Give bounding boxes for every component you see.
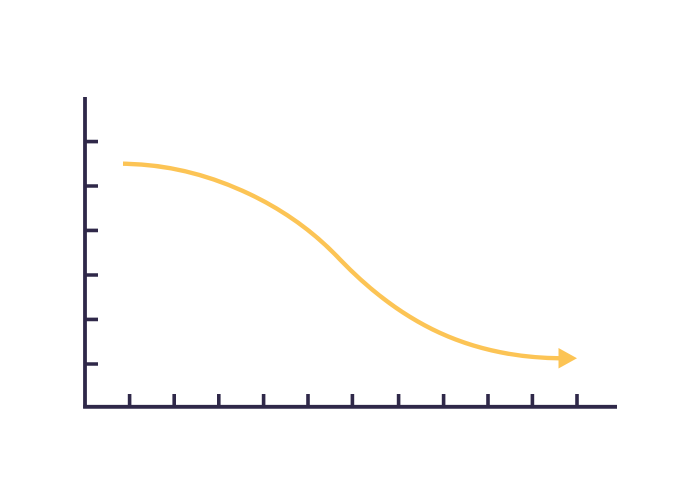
trend curve with arrow <box>123 164 577 368</box>
x axis ticks <box>130 394 577 406</box>
curve line <box>123 164 561 358</box>
arrowhead <box>558 348 577 368</box>
y axis ticks <box>85 142 98 364</box>
y axis <box>85 97 98 408</box>
x axis <box>83 394 617 407</box>
